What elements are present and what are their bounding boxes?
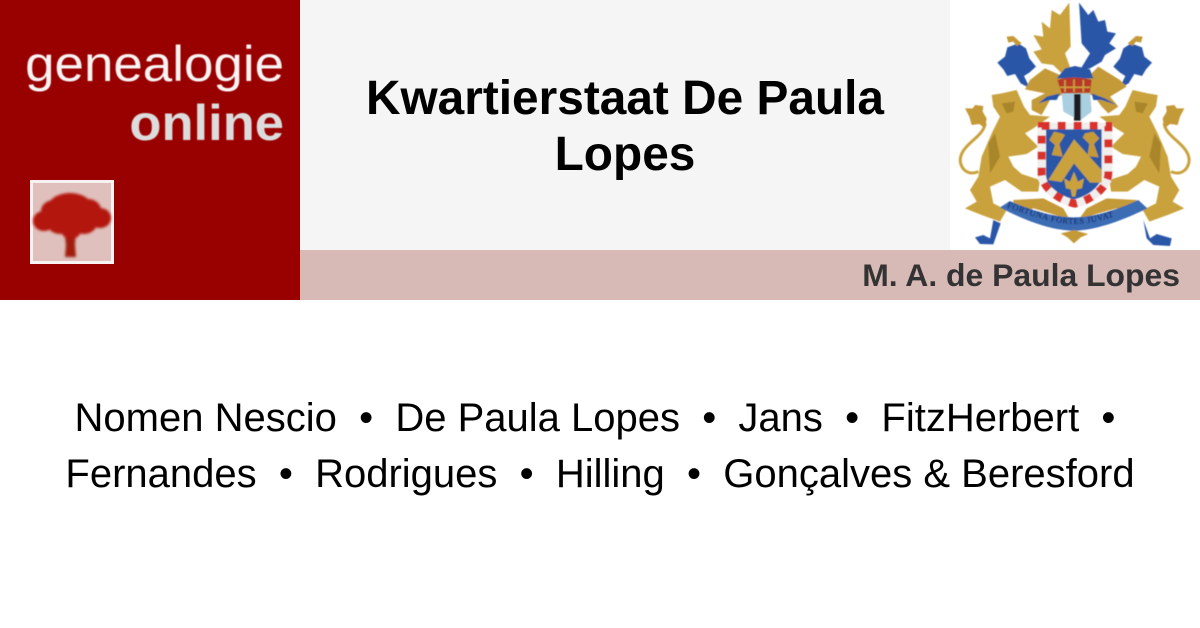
motto text: FORTUNA FORTES JUVAT bbox=[1007, 202, 1112, 224]
bottom ornament bbox=[1061, 230, 1088, 243]
crown bbox=[1057, 66, 1093, 78]
panel: author bar bbox=[300, 250, 1200, 300]
motto ribbon bbox=[1000, 200, 1147, 231]
shield border bbox=[1037, 123, 1113, 208]
author name: M. A. de Paula Lopes bbox=[862, 257, 1180, 293]
panel: logo bbox=[0, 0, 300, 300]
icon: coat of arms bbox=[958, 2, 1192, 247]
helmet bbox=[1062, 93, 1092, 121]
panel: title background bbox=[300, 0, 950, 250]
title: Kwartierstaat De Paula bbox=[366, 72, 884, 125]
crest wings bbox=[1033, 3, 1072, 75]
charges bbox=[1049, 132, 1065, 157]
title: Lopes bbox=[555, 128, 695, 181]
title bbox=[366, 72, 884, 181]
text block: family names: Nomen Nescio • De Paula Lopes • Jans • FitzHerbert • Fernandes • Rodrigues • Hilling • Gonçalves & Beresford bbox=[65, 396, 1135, 496]
gold mantling bbox=[1025, 67, 1127, 115]
ribbon tails bbox=[975, 220, 1001, 244]
shield field bbox=[1046, 129, 1102, 199]
gold foliage under shield bbox=[1013, 198, 1070, 220]
icon: tree bbox=[30, 180, 114, 264]
logo word: online: online bbox=[129, 95, 284, 151]
left and right supporters bbox=[960, 36, 1050, 222]
logo word: genealogie: genealogie bbox=[25, 36, 284, 92]
chevron bbox=[1048, 139, 1102, 183]
